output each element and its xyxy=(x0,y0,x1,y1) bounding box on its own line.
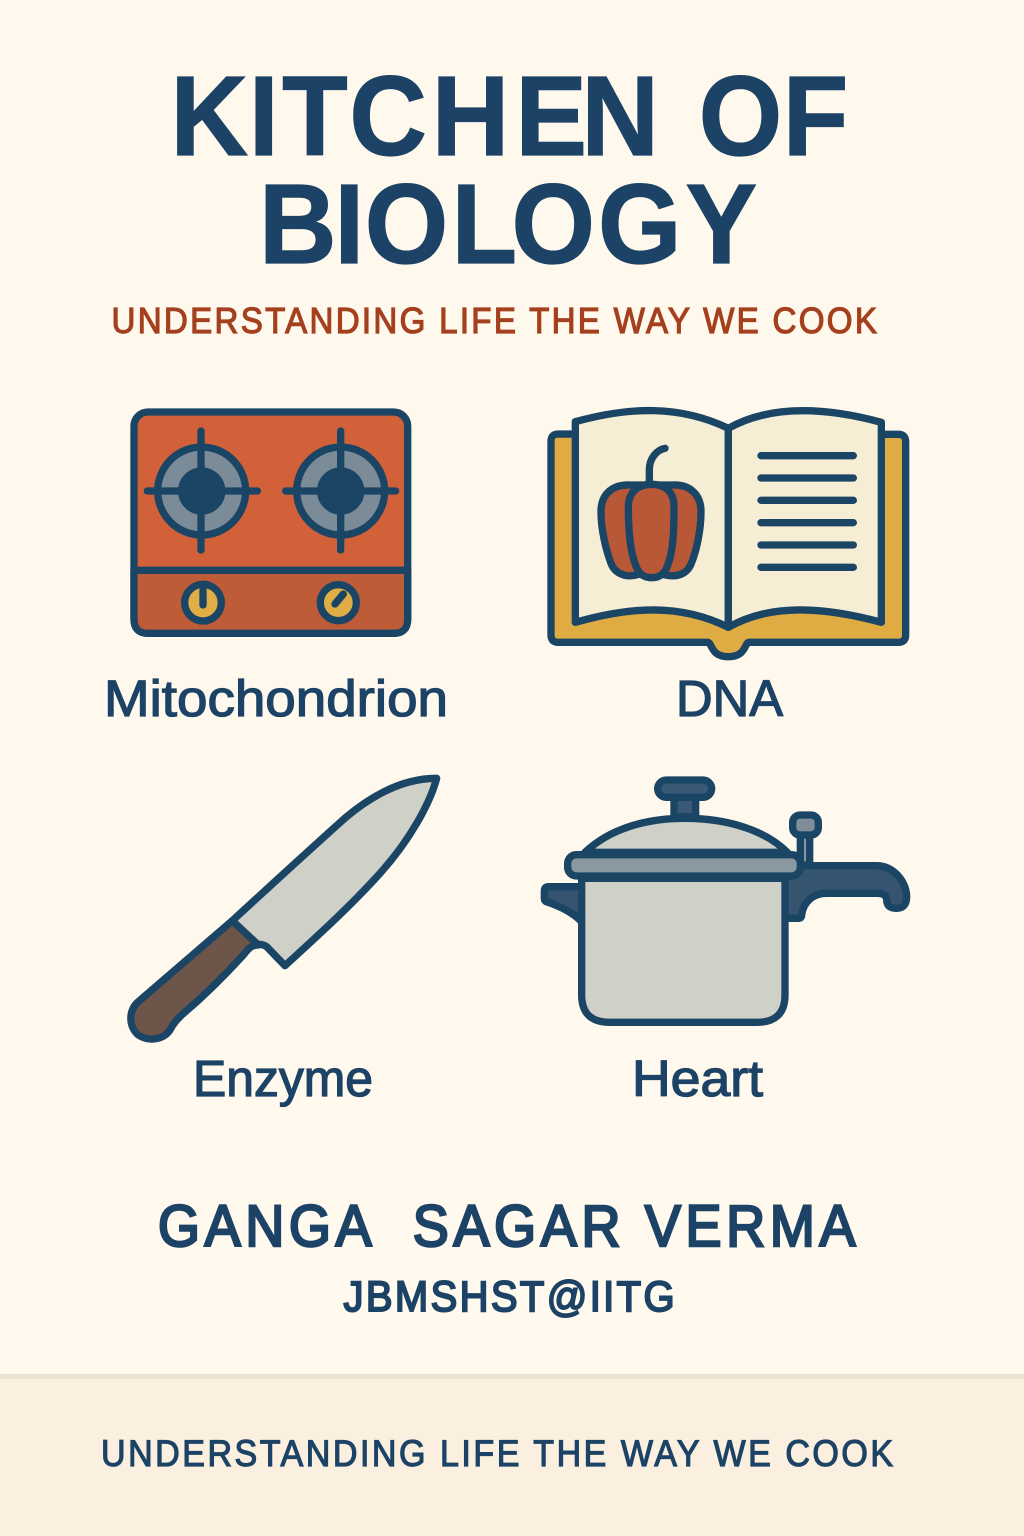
label: Heart: Heart xyxy=(632,1050,763,1107)
author affiliation: JBMSHST@IITG xyxy=(344,1272,675,1320)
footer tagline: UNDERSTANDING LIFE THE WAY WE COOK xyxy=(101,1433,893,1474)
icon: pressure cooker (Heart) xyxy=(544,780,907,1022)
icon: gas stove (Mitochondrion) xyxy=(134,412,408,633)
icon: chef knife (Enzyme) xyxy=(131,778,437,1039)
title: BIOLOGY xyxy=(259,161,757,288)
author name: GANGA SAGAR VERMA xyxy=(158,1193,856,1258)
subtitle: UNDERSTANDING LIFE THE WAY WE COOK xyxy=(112,302,877,341)
label: Mitochondrion: Mitochondrion xyxy=(104,670,448,727)
title xyxy=(171,53,848,288)
label: Enzyme: Enzyme xyxy=(193,1050,373,1107)
title: KITCHEN OF xyxy=(171,53,848,180)
icon: recipe book (DNA) xyxy=(551,411,906,657)
footer band xyxy=(0,1374,1024,1536)
label: DNA: DNA xyxy=(676,670,783,727)
